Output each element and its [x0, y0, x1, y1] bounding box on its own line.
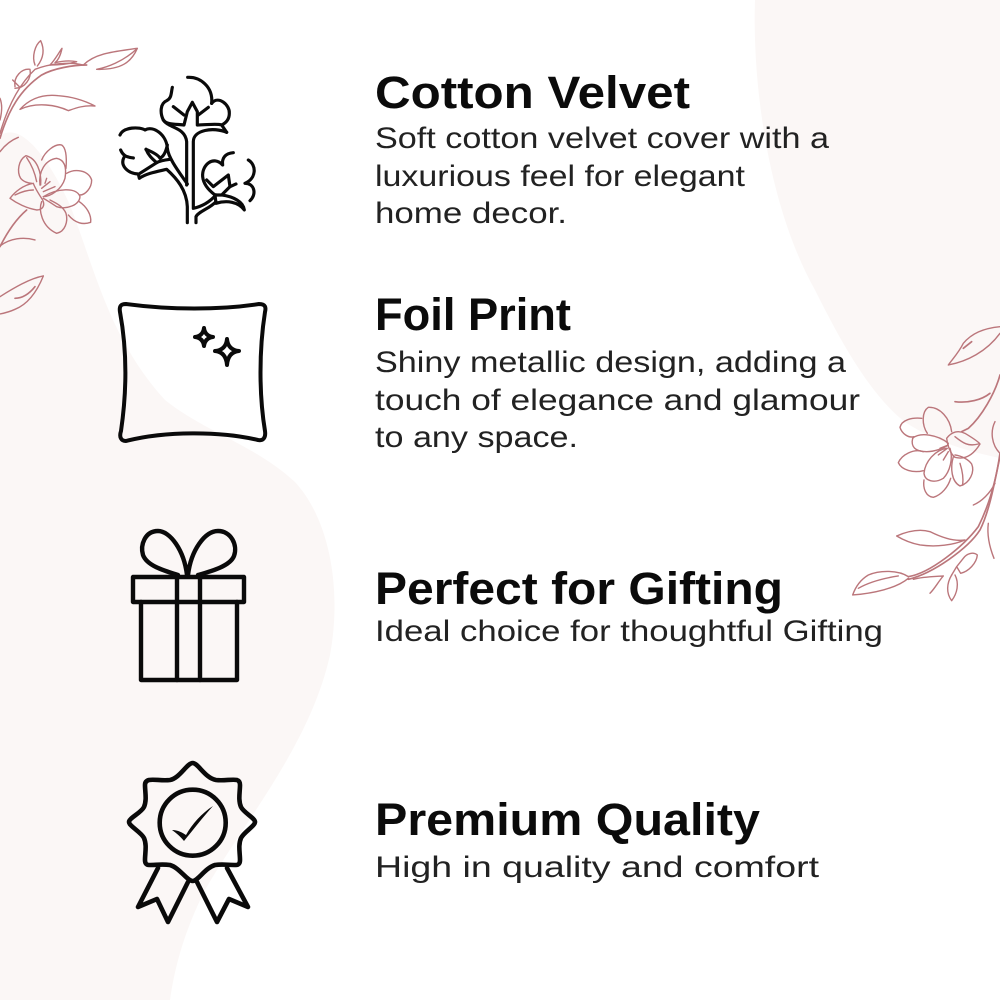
heading: Premium Quality: [375, 794, 760, 845]
heading: Perfect for Gifting: [375, 563, 783, 614]
icon: quality badge: [129, 763, 255, 922]
background blob: left: [0, 132, 335, 1000]
icon: cushion with sparkles: [120, 304, 265, 441]
description: home decor.: [375, 197, 567, 230]
description: [375, 346, 860, 454]
floral decoration: right flower: [898, 407, 980, 497]
floral decoration: left flower: [10, 145, 92, 233]
description: [375, 122, 829, 230]
description: High in quality and comfort: [375, 851, 820, 884]
background blob: top right: [755, 0, 1000, 458]
heading: Cotton Velvet: [375, 67, 690, 118]
floral decoration: top left branch: [0, 41, 137, 314]
icon: gift box: [133, 531, 244, 680]
description: touch of elegance and glamour: [375, 384, 860, 417]
icon: large sparkle: [215, 339, 239, 365]
feature: Cotton Velvet: [375, 67, 829, 230]
heading: Foil Print: [375, 289, 571, 340]
description: luxurious feel for elegant: [375, 160, 746, 193]
feature: Perfect for Gifting: [375, 563, 883, 648]
icon: small sparkle: [195, 328, 213, 346]
icon: cotton plant: [120, 77, 254, 223]
description: to any space.: [375, 421, 578, 454]
description: Shiny metallic design, adding a: [375, 346, 846, 379]
feature: Foil Print: [375, 289, 860, 454]
feature: Premium Quality: [375, 794, 820, 884]
description: Soft cotton velvet cover with a: [375, 122, 829, 155]
floral decoration: right branch: [853, 327, 1000, 601]
description: Ideal choice for thoughtful Gifting: [375, 615, 883, 648]
